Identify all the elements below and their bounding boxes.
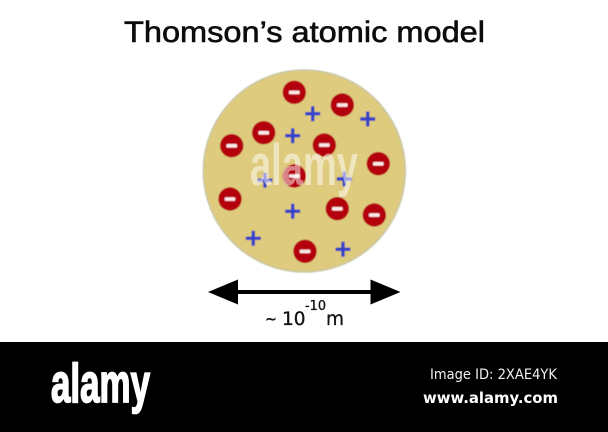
footer band xyxy=(0,342,608,432)
size label: m xyxy=(326,309,344,330)
size label: ~ xyxy=(265,309,277,330)
atom sphere xyxy=(203,70,405,272)
size label xyxy=(265,299,344,330)
title: Thomson’s atomic model xyxy=(124,16,485,49)
size label: 10 xyxy=(282,309,306,330)
atom diagram xyxy=(203,70,405,272)
positive charges xyxy=(246,106,375,257)
footer logo: alamy xyxy=(51,352,150,414)
negative electrons xyxy=(218,81,390,263)
size arrow xyxy=(208,280,400,304)
website: www.alamy.com xyxy=(423,389,558,407)
watermark: alamy xyxy=(250,133,358,198)
image id: Image ID: 2XAE4YK xyxy=(430,367,558,383)
size label: -10 xyxy=(305,299,326,314)
